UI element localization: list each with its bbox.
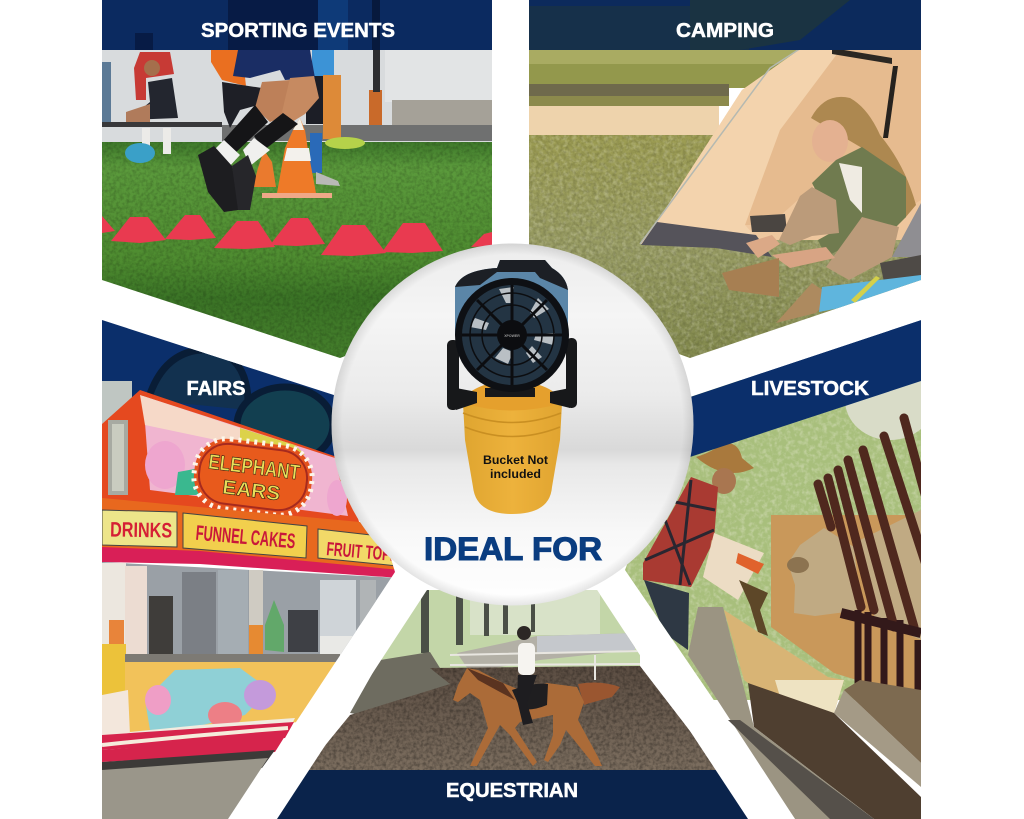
heading band: camping xyxy=(529,0,921,50)
horse xyxy=(453,668,620,766)
elephant ears sign xyxy=(190,435,316,519)
central circle xyxy=(332,244,694,606)
panel: sporting events xyxy=(102,0,492,358)
fan stand xyxy=(447,338,577,410)
heading: livestock: LIVESTOCK xyxy=(751,378,870,400)
jumping player xyxy=(198,50,319,212)
bucket xyxy=(463,381,562,514)
fence rails xyxy=(818,418,926,627)
fan highlights xyxy=(470,287,555,364)
fruit toppings sign: FRUIT TOPP xyxy=(326,539,399,566)
cow xyxy=(787,510,921,640)
heading band: equestrian xyxy=(270,770,760,819)
bucket: Bucket Not xyxy=(483,453,548,467)
rider xyxy=(512,626,548,725)
background players xyxy=(102,50,365,186)
heading: sporting events: SPORTING EVENTS xyxy=(201,20,395,42)
elephant ears sign: ELEPHANT xyxy=(207,451,301,485)
tent xyxy=(640,50,921,257)
fruit toppings sign xyxy=(318,529,399,566)
bucket: included xyxy=(490,467,541,481)
fair stall xyxy=(102,390,400,819)
heading: ideal for: IDEAL FOR xyxy=(424,531,602,567)
heading: fairs: FAIRS xyxy=(186,378,246,400)
panel: camping xyxy=(529,0,921,358)
farmer xyxy=(643,443,768,650)
funnel cakes sign: FUNNEL CAKES xyxy=(195,522,296,553)
panel: equestrian xyxy=(270,585,760,819)
feed trough xyxy=(688,607,921,819)
camper xyxy=(722,97,921,323)
training cones xyxy=(102,215,492,256)
heading band: sporting events xyxy=(102,0,492,50)
fan grille xyxy=(462,285,562,385)
panel: livestock xyxy=(620,320,935,819)
panel: fairs xyxy=(102,320,402,819)
drinks sign: DRINKS xyxy=(110,518,172,543)
heading: equestrian: EQUESTRIAN xyxy=(446,780,578,802)
drinks sign xyxy=(102,510,177,547)
icon: fan with bucket xyxy=(447,260,577,514)
elephant ears sign: EARS xyxy=(221,476,281,505)
heading band: livestock xyxy=(690,320,921,457)
fence posts xyxy=(840,608,921,690)
heading: camping: CAMPING xyxy=(676,20,774,42)
icon: fan with bucket: XPOWER xyxy=(504,334,520,338)
traffic cones xyxy=(253,118,332,198)
funnel cakes sign xyxy=(183,513,307,558)
fan body xyxy=(455,260,568,335)
